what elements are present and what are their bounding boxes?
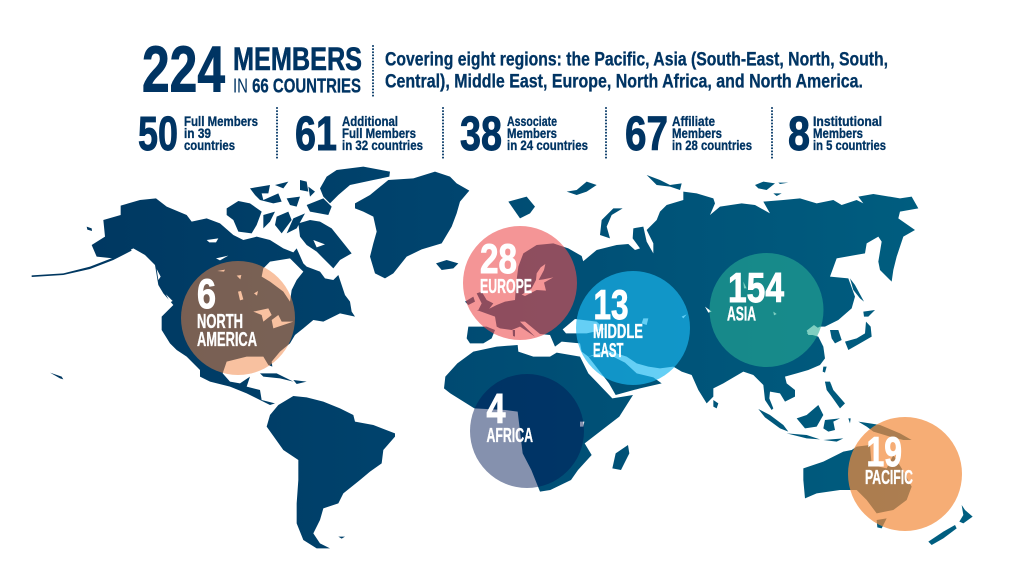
- region circle: middle east: MIDDLE: [593, 321, 643, 343]
- australia: [803, 445, 912, 513]
- countries subheading: IN 66 COUNTRIES: [233, 76, 361, 98]
- stat: full members: Full Members: [184, 114, 258, 129]
- header: total members: [142, 32, 362, 106]
- arabia: [588, 353, 662, 395]
- stat: institutional members: Members: [813, 126, 863, 141]
- region circle: pacific: [848, 417, 962, 531]
- stat: full members: [138, 108, 258, 161]
- stat: institutional members: [788, 108, 886, 161]
- regions description: [385, 48, 888, 92]
- region circle: north america: NORTH: [197, 311, 243, 333]
- east asia islands: [850, 278, 864, 302]
- region circle: europe: [463, 226, 577, 340]
- stat: institutional members: 8: [788, 108, 810, 161]
- region circle: asia: ASIA: [727, 304, 756, 326]
- stat: associate members: 38: [460, 108, 502, 161]
- region circle: middle east: 13: [594, 281, 628, 328]
- stat: additional full members: in 32 countries: [342, 138, 423, 153]
- map: north america and arctic islands: [32, 167, 469, 548]
- regions description: Central), Middle East, Europe, North Africa, and North America.: [385, 70, 863, 92]
- region circle: asia: 154: [728, 264, 785, 311]
- region circle: pacific: PACIFIC: [865, 467, 913, 489]
- region circle: pacific: 19: [866, 428, 902, 475]
- region circle: europe: EUROPE: [480, 276, 532, 298]
- eurasia: [477, 192, 918, 410]
- stat: additional full members: Full Members: [342, 126, 416, 141]
- region circle: north america: AMERICA: [197, 329, 257, 351]
- stat: additional full members: Additional: [342, 114, 398, 129]
- region circle: north america: [181, 261, 295, 375]
- stat: full members: 50: [138, 108, 178, 161]
- africa: [444, 345, 633, 492]
- stat: additional full members: 61: [295, 108, 337, 161]
- total number: 224: [142, 32, 225, 106]
- region circle: africa: [470, 374, 584, 488]
- stat: additional full members: [295, 108, 423, 161]
- region circle: africa: 4: [486, 385, 506, 432]
- region circle: middle east: [576, 271, 690, 385]
- stat: affiliate members: 67: [625, 108, 668, 161]
- stat: institutional members: in 5 countries: [813, 138, 886, 153]
- arctic islands: [508, 197, 535, 218]
- region circle: north america: 6: [197, 270, 216, 317]
- stat: full members: countries: [184, 138, 235, 153]
- new zealand: [959, 505, 973, 523]
- south-east asia islands: [713, 400, 718, 408]
- region circle: europe: 28: [480, 235, 517, 282]
- iberia: [467, 327, 495, 343]
- region circle: asia: [710, 253, 824, 367]
- regions description: Covering eight regions: the Pacific, Asia (South-East, North, South,: [385, 48, 888, 70]
- members heading: MEMBERS: [233, 41, 362, 77]
- iceland: [436, 260, 458, 270]
- stat: affiliate members: [625, 108, 752, 161]
- greenland: [355, 172, 469, 278]
- map: eurasia, africa and oceania: [444, 175, 973, 545]
- region circle: africa: AFRICA: [486, 425, 533, 447]
- stat: full members: in 39: [184, 126, 211, 141]
- stat: affiliate members: Affiliate: [672, 114, 715, 129]
- stat: associate members: [460, 108, 588, 161]
- stat: institutional members: Institutional: [813, 114, 882, 129]
- stat: affiliate members: in 28 countries: [672, 138, 752, 153]
- inland seas: [522, 264, 820, 427]
- hudson bay, lakes and coastal channels: [157, 238, 325, 373]
- stat: associate members: in 24 countries: [507, 138, 588, 153]
- stat: associate members: Members: [507, 126, 557, 141]
- stat: associate members: Associate: [507, 114, 557, 129]
- south america: [267, 396, 395, 548]
- world map: [32, 167, 973, 548]
- region circle: middle east: EAST: [593, 340, 624, 362]
- stat: affiliate members: Members: [672, 126, 722, 141]
